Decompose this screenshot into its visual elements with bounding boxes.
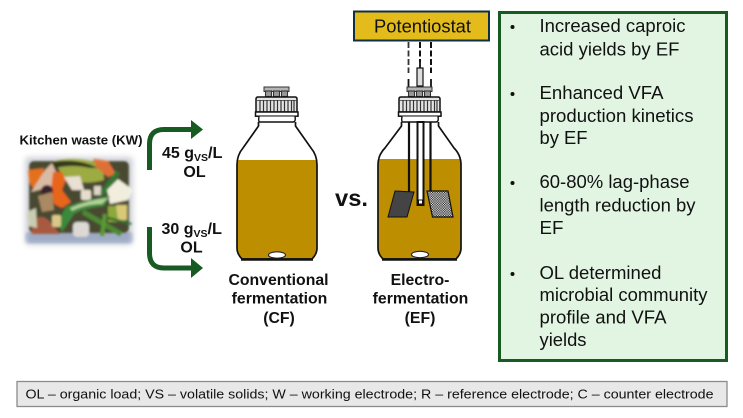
legend: abbreviations: OL – organic load; VS – volatile solids; W – working electrode; R – reference electrode; C – counter electrode xyxy=(26,386,714,402)
label: 45 g VS/L OL: VS xyxy=(194,152,208,164)
label: 45 g VS/L OL: OL xyxy=(183,164,206,181)
label: electro-fermentation: fermentation xyxy=(373,290,468,308)
label: conventional fermentation: Conventional xyxy=(228,272,329,289)
bullet: microbial community: OL determined xyxy=(540,263,662,283)
panel: key findings xyxy=(500,12,726,360)
box: potentiostat: Potentiostat xyxy=(374,16,471,36)
label: 30 g VS/L OL: OL xyxy=(180,240,203,256)
wires: potentiostat connections xyxy=(408,42,431,87)
bottle: electro-fermentation xyxy=(378,68,461,260)
label: 45 g VS/L OL xyxy=(162,145,223,181)
box: potentiostat xyxy=(354,12,489,40)
label: vs.: vs. xyxy=(335,185,368,211)
bullet: lag-phase reduction: 60-80% lag-phase xyxy=(540,172,690,192)
arrow: top branch to 45 g/L xyxy=(150,120,203,170)
label: 30 g VS/L OL: /L xyxy=(208,221,222,238)
label: conventional fermentation: fermentation xyxy=(232,290,327,308)
bullet: lag-phase reduction: EF xyxy=(540,218,564,238)
electrode: reference xyxy=(418,122,424,205)
bullet: lag-phase reduction: length reduction by xyxy=(540,196,696,216)
label: 30 g VS/L OL: VS xyxy=(194,228,208,240)
bullet: microbial community: microbial community xyxy=(540,285,708,305)
bullet: caproic acid yields: Increased caproic xyxy=(540,16,686,36)
label: conventional fermentation: (CF) xyxy=(263,310,295,327)
label: electro-fermentation: (EF) xyxy=(405,310,435,327)
bullet: caproic acid yields: acid yields by EF xyxy=(540,40,680,60)
bullet: lag-phase reduction xyxy=(510,172,696,238)
heading: kitchen waste label: Kitchen waste (KW) xyxy=(20,132,142,148)
photo: kitchen waste in tray xyxy=(22,154,136,248)
bullet: VFA kinetics: Enhanced VFA xyxy=(540,83,664,103)
bullet: VFA kinetics xyxy=(510,83,694,148)
bullet: VFA kinetics: production kinetics xyxy=(540,106,694,126)
bullet: VFA kinetics: by EF xyxy=(540,128,588,148)
electrode: working xyxy=(388,122,414,217)
label: electro-fermentation: Electro- xyxy=(391,272,449,289)
legend: abbreviations xyxy=(17,382,727,406)
bullet: caproic acid yields xyxy=(510,16,686,60)
label: 30 g VS/L OL: 30 g xyxy=(162,221,194,238)
bullet: microbial community xyxy=(510,263,708,350)
label: electro-fermentation xyxy=(373,272,468,327)
label: conventional fermentation xyxy=(228,272,329,327)
bullet: microbial community: yields xyxy=(540,330,586,350)
arrow: bottom branch to 30 g/L xyxy=(150,227,203,278)
label: 45 g VS/L OL: /L xyxy=(208,145,223,162)
label: 30 g VS/L OL xyxy=(162,221,222,256)
bullet: microbial community: profile and VFA xyxy=(540,308,666,328)
electrode: counter xyxy=(427,122,453,217)
label: 45 g VS/L OL: 45 g xyxy=(162,145,194,162)
bottle: conventional fermentation xyxy=(237,87,317,260)
